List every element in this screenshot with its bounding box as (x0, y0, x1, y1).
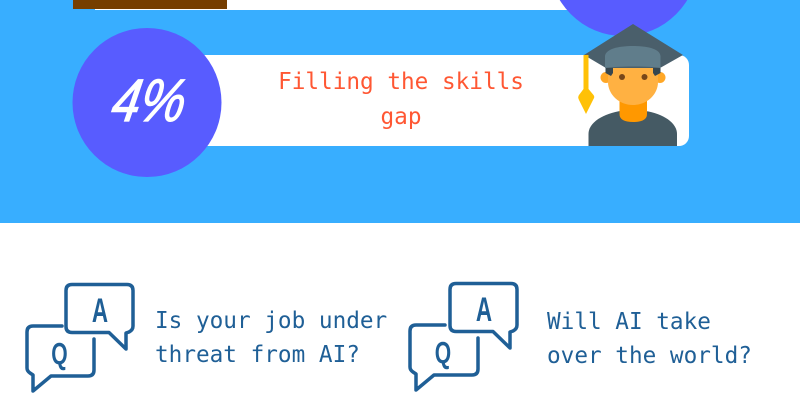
percentage badge (72, 28, 222, 177)
icon: Q and A bubbles, right: Q (435, 335, 451, 370)
percentage badge: 4% (107, 66, 192, 134)
icon: Q and A bubbles, right (410, 284, 517, 390)
icon: Q and A bubbles, left: A (92, 292, 108, 330)
question text, left (155, 308, 387, 368)
card: filling the skills gap (190, 55, 689, 146)
question text, right: Will AI take (547, 309, 711, 335)
question text, left: Is your job under (155, 308, 387, 334)
previous row card (73, 0, 698, 36)
icon: Q and A bubbles, right: A (476, 291, 492, 329)
question text, left: threat from AI? (155, 342, 360, 368)
card text: Filling the skills (278, 69, 524, 95)
blue panel (0, 0, 800, 223)
question text, right: over the world? (547, 343, 752, 369)
question text, right (547, 309, 752, 369)
icon: Q and A bubbles, left (27, 284, 133, 391)
card text second line: gap (381, 104, 421, 130)
icon: Q and A bubbles, left: Q (51, 336, 68, 371)
icon: graduate (578, 24, 683, 146)
